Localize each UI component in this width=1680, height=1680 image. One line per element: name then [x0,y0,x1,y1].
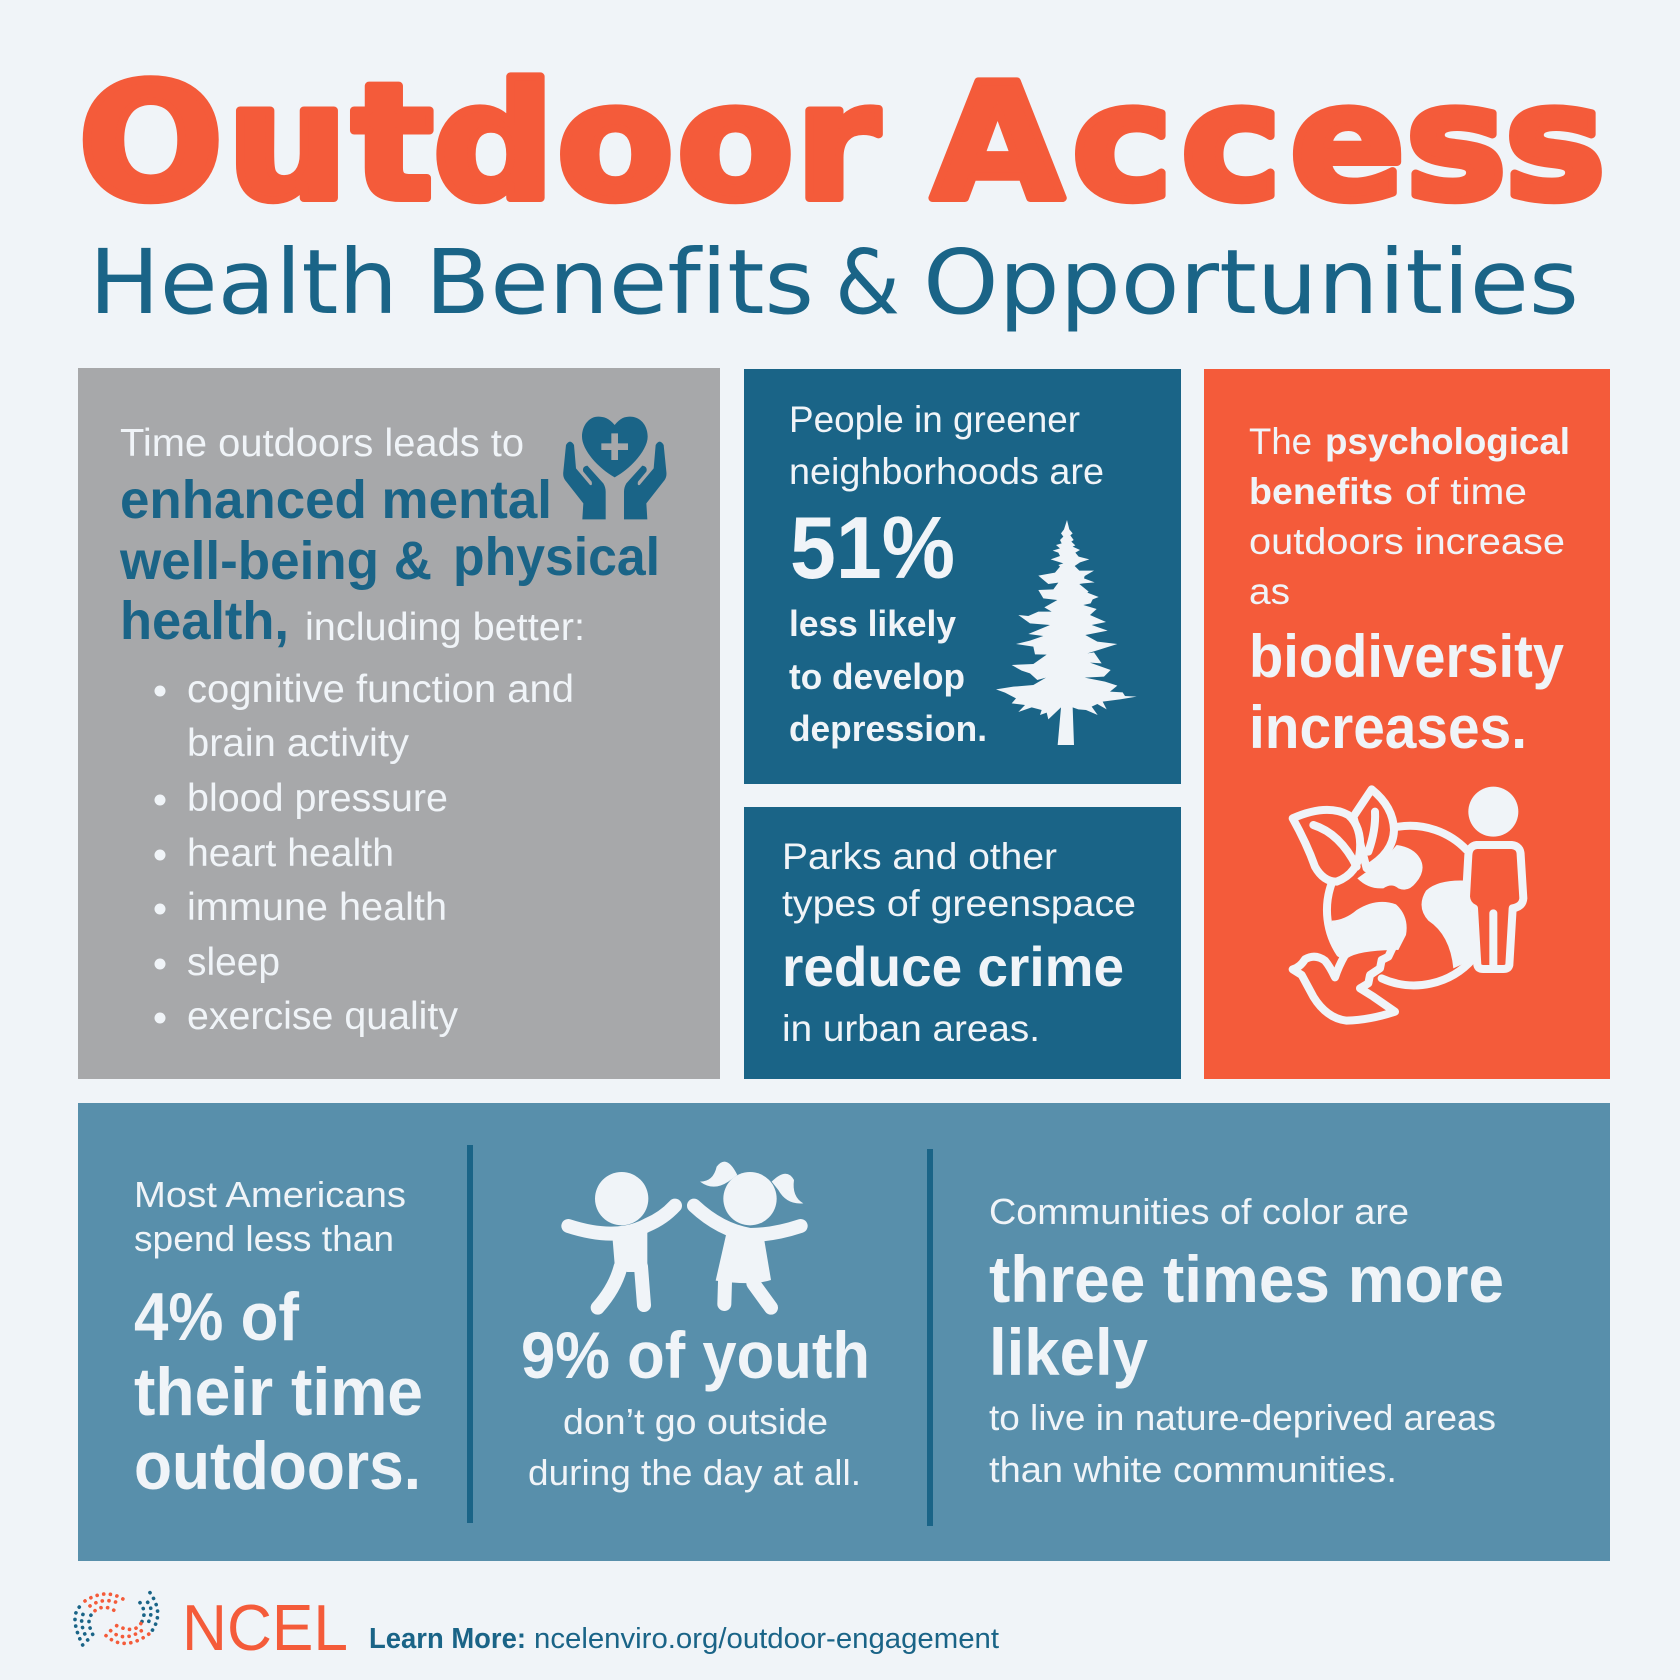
biodiversity text: of time [1405,471,1527,512]
biodiversity text: biodiversity [1249,623,1565,690]
biodiversity text: The [1249,421,1312,462]
footer: learn more link: ncelenviro.org/outdoor-engagement [534,1623,999,1655]
bullet list: heart health [187,832,394,875]
intro text: well-being & [119,531,432,591]
statistic: time outdoors: outdoors. [134,1428,421,1504]
bullet list: sleep [187,941,280,984]
intro text: physical [453,527,660,587]
icon: hands holding heart [563,417,666,519]
title: Outdoor Access [79,50,1606,236]
panel: greenspace reduces crime: Parks and other [782,836,1057,877]
statistic: communities of color: to live in nature-deprived areas [989,1397,1496,1438]
bullet list [154,668,574,1038]
statistic text: less likely [789,603,956,644]
intro text: health, [120,591,289,651]
statistic: communities of color: three times more [989,1242,1504,1316]
biodiversity text [1249,421,1570,761]
intro text: including better: [305,606,585,649]
statistic text [789,399,1104,749]
panel: greenspace reduces crime: types of greenspace [782,883,1136,924]
statistic: time outdoors: Most Americans [134,1174,406,1215]
panel: greenspace reduces crime: reduce crime [782,935,1124,998]
bullet list: exercise quality [187,995,458,1038]
panel: mental well-being and physical health [78,368,720,1079]
biodiversity text: as [1249,571,1290,612]
bullet list: brain activity [187,722,410,765]
icon: evergreen tree [996,520,1137,745]
statistic text: to develop [789,656,965,697]
statistic text: neighborhoods are [789,451,1104,492]
icon: globe, leaves, bird and person [1293,787,1523,1021]
icon: dotted circular logo mark [75,1593,158,1645]
panel: greenspace reduces crime [744,807,1181,1079]
statistic text: 51% [790,498,955,597]
icon: two children [568,1162,803,1308]
subtitle: & [835,230,900,334]
statistic text: depression. [789,708,987,749]
subtitle: Benefits [425,230,814,334]
logo wordmark: NCEL [182,1591,348,1664]
statistic: youth: don’t go outside [563,1401,828,1442]
intro text: Time outdoors leads to [120,422,524,465]
bullet list: blood pressure [187,777,448,820]
statistic: youth: 9% of youth [521,1318,870,1392]
bullet list: cognitive function and [187,668,574,711]
bullet list: immune health [187,886,447,929]
statistic: communities of color [989,1191,1504,1490]
statistic: youth [521,1318,870,1493]
statistic: youth: during the day at all. [528,1452,861,1493]
subtitle [89,230,1579,334]
statistic: time outdoors: 4% of [134,1279,299,1355]
statistic: communities of color: Communities of color are [989,1191,1409,1232]
statistic text: People in greener [789,399,1080,440]
statistic: communities of color: than white communities. [989,1449,1397,1490]
statistic: time outdoors: spend less than [134,1218,394,1259]
panel: greenspace reduces crime: in urban areas. [782,1008,1040,1049]
footer: learn more link: Learn More: [369,1623,526,1655]
biodiversity text: psychological [1325,421,1570,462]
panel: biodiversity [1204,369,1610,1079]
biodiversity text: increases. [1249,694,1527,761]
subtitle: Opportunities [923,230,1579,334]
panel: greener neighborhoods [744,369,1181,784]
intro text [119,422,660,651]
statistic: time outdoors [134,1174,423,1504]
biodiversity text: benefits [1249,471,1393,512]
statistic: time outdoors: their time [134,1354,423,1430]
subtitle: Health [89,230,398,334]
panel: bottom statistics [78,1103,1610,1561]
biodiversity text: outdoors increase [1249,521,1565,562]
intro text: enhanced mental [120,470,552,530]
statistic: communities of color: likely [989,1315,1148,1389]
footer: NCEL logo [75,1591,348,1664]
